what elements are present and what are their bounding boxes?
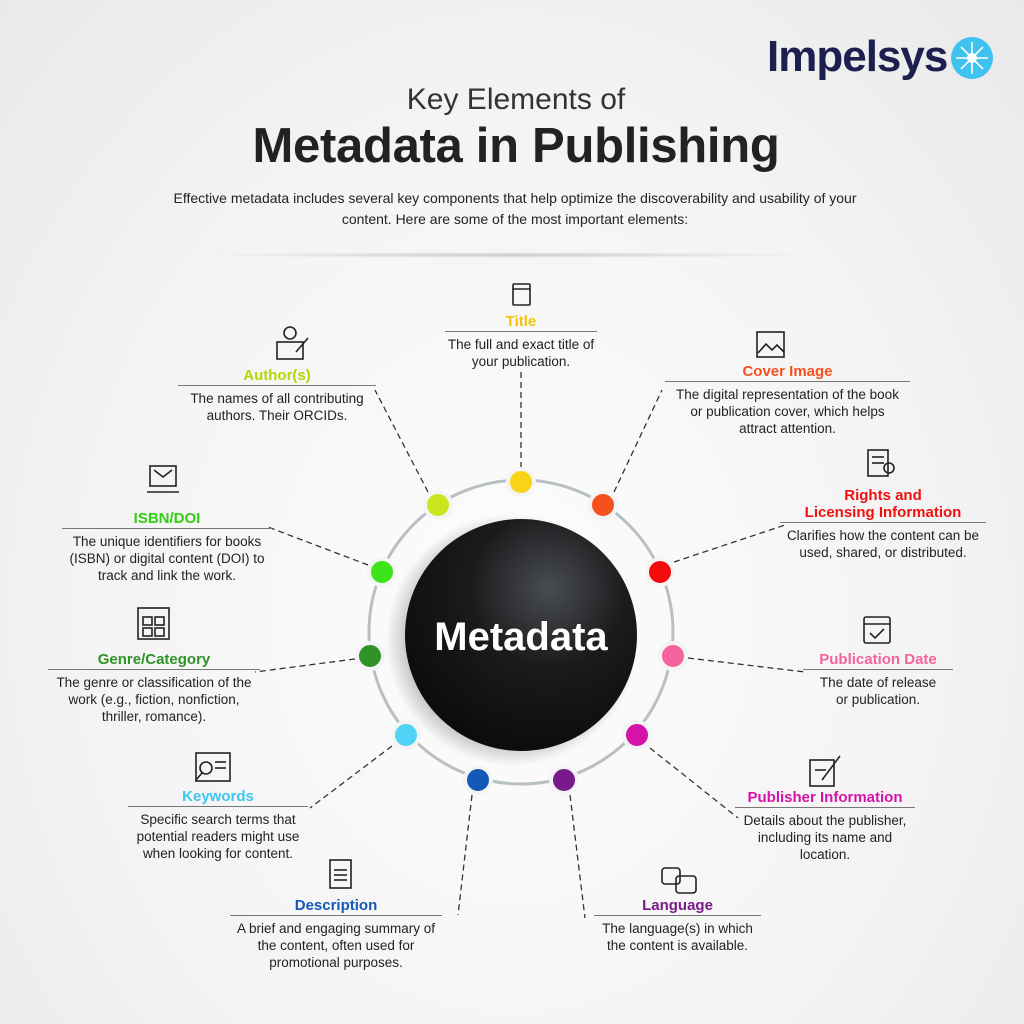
item: title [445,313,597,369]
item: publisher: Details about the publisher, [744,813,906,828]
center circle [405,519,637,751]
item: author [178,367,376,423]
intro text: Effective metadata includes several key components that help optimize the discoverability and usability of your [174,190,856,206]
item: cover image: or publication cover, which helps [690,404,885,419]
item: language: Language [642,897,713,914]
item: genre: work (e.g., fiction, nonfiction, [68,692,240,707]
item: description: promotional purposes. [269,955,403,970]
item: rights: Licensing Information [805,504,961,521]
item: description: Description [295,897,377,914]
item: publication date: The date of release [820,675,936,690]
item: author: Author(s) [243,367,311,384]
item: language [594,897,761,953]
item: cover image: Cover Image [742,363,833,380]
title [252,83,780,173]
icons [138,284,894,893]
intro text: content. Here are some of the most important elements: [342,211,688,227]
item: cover image: attract attention. [739,421,836,436]
item: description: the content, often used for [258,938,414,953]
item: isbn [62,510,272,583]
item: publication date: or publication. [836,692,920,707]
item: keywords [128,788,308,861]
item: keywords: when looking for content. [143,846,293,861]
intro text [174,190,856,227]
item: title: The full and exact title of [448,337,594,352]
item: rights: used, shared, or distributed. [799,545,967,560]
item: genre: Genre/Category [98,651,210,668]
item: isbn: (ISBN) or digital content (DOI) to [69,551,265,566]
item: description: A brief and engaging summary of [237,921,435,936]
title: Key Elements of [407,83,625,116]
item: language: The language(s) in which [602,921,753,936]
item: publication date: Publication Date [819,651,937,668]
center circle: Metadata [434,615,608,659]
item: publisher [735,789,915,862]
item: language: the content is available. [607,938,748,953]
item: author: authors. Their ORCIDs. [207,408,347,423]
item: isbn: The unique identifiers for books [73,534,261,549]
item: publisher: including its name and [758,830,892,845]
item: genre: The genre or classification of the [56,675,252,690]
item: rights [780,487,986,560]
item: rights: Rights and [844,487,922,504]
item: isbn: track and link the work. [98,568,236,583]
item: keywords: potential readers might use [137,829,299,844]
item: publication date [803,651,953,707]
item: publisher: Publisher Information [747,789,902,806]
item: description [230,897,442,970]
item: keywords: Specific search terms that [140,812,296,827]
item: author: The names of all contributing [190,391,364,406]
item: genre [48,651,260,724]
item: rights: Clarifies how the content can be [787,528,979,543]
title: Metadata in Publishing [252,119,780,173]
logo: Impelsys [767,32,947,81]
item: keywords: Keywords [182,788,254,805]
item: isbn: ISBN/DOI [134,510,200,527]
item: title: your publication. [472,354,570,369]
item: genre: thriller, romance). [102,709,206,724]
item: cover image [665,363,910,436]
item: publisher: location. [800,847,850,862]
item: cover image: The digital representation of the book [676,387,899,402]
item: title: Title [506,313,536,330]
